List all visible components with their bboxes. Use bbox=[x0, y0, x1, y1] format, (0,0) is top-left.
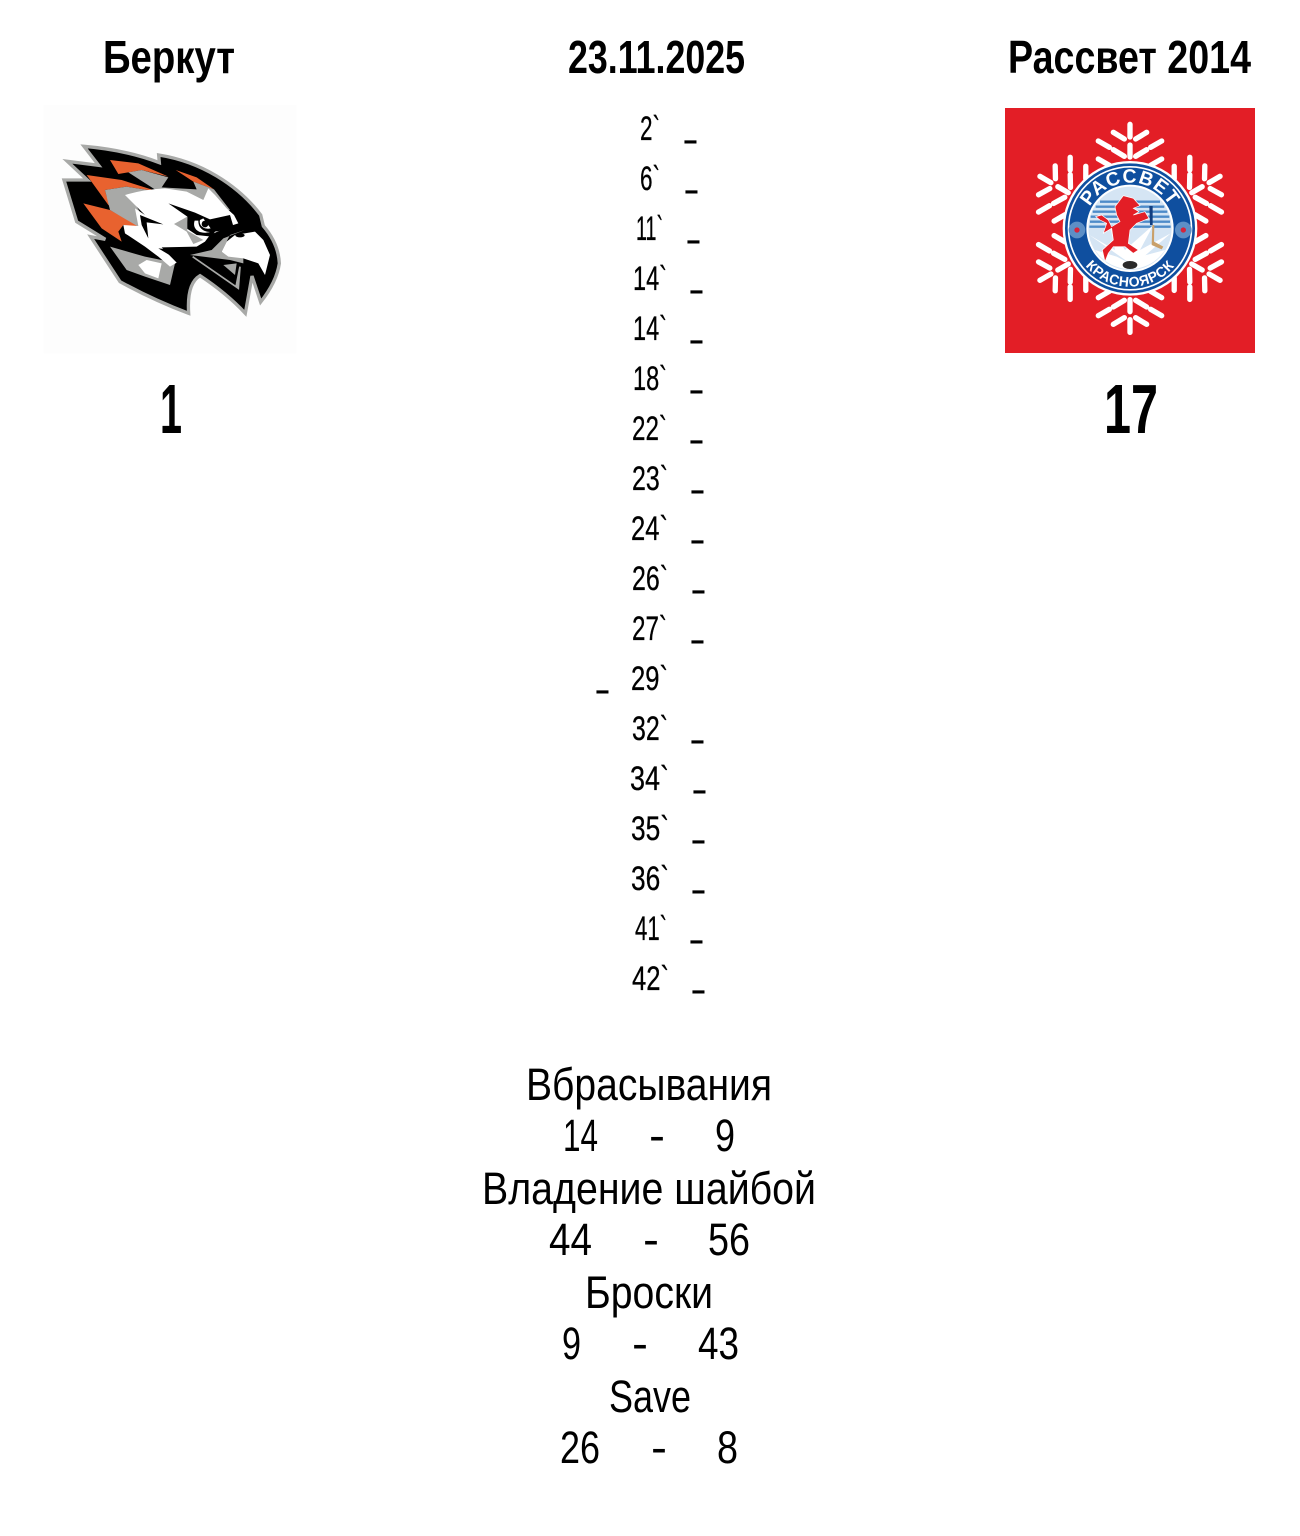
goal timeline: 14` bbox=[633, 260, 667, 298]
stat: saves: Save bbox=[609, 1371, 691, 1422]
crest disc: РАССВЕТ bbox=[1080, 169, 1181, 206]
goal timeline: _ bbox=[692, 806, 705, 844]
goal timeline: _ bbox=[690, 906, 703, 944]
goal timeline: _ bbox=[691, 706, 704, 744]
crest disc bbox=[1062, 161, 1198, 296]
stat: puck possession: 56 bbox=[708, 1214, 750, 1265]
stat: puck possession: 44 bbox=[549, 1214, 592, 1265]
stat: shots: Броски bbox=[585, 1267, 713, 1318]
goal timeline: _ bbox=[692, 956, 705, 994]
goal timeline: 22` bbox=[632, 410, 667, 448]
away team name: Рассвет 2014 bbox=[1008, 31, 1251, 83]
goal timeline: 29` bbox=[631, 660, 668, 698]
goal timeline: 26` bbox=[632, 560, 668, 598]
stat: saves: - bbox=[651, 1422, 667, 1473]
goal timeline: _ bbox=[692, 856, 705, 894]
stat: faceoffs bbox=[526, 1059, 772, 1161]
goal timeline: _ bbox=[690, 256, 703, 294]
stat: puck possession: - bbox=[643, 1214, 659, 1265]
match date: 23.11.2025 bbox=[568, 31, 745, 83]
stat: saves bbox=[560, 1371, 738, 1473]
stat: faceoffs: - bbox=[649, 1110, 665, 1161]
goal timeline: _ bbox=[693, 756, 706, 794]
goal timeline: _ bbox=[596, 656, 609, 694]
lion and stick bbox=[1096, 196, 1163, 262]
stat: faceoffs: 9 bbox=[715, 1110, 735, 1161]
stat: shots: 43 bbox=[698, 1318, 739, 1369]
goal timeline: _ bbox=[690, 306, 703, 344]
goal timeline: 41` bbox=[635, 910, 667, 948]
goal timeline: 27` bbox=[632, 610, 667, 648]
goal timeline: _ bbox=[687, 206, 700, 244]
stat: saves: 26 bbox=[560, 1422, 600, 1473]
goal timeline: _ bbox=[685, 156, 698, 194]
goal timeline bbox=[596, 106, 706, 998]
snowflake bbox=[1024, 124, 1236, 332]
goal timeline: 14` bbox=[633, 310, 667, 348]
goal timeline: _ bbox=[692, 556, 705, 594]
stat: shots: - bbox=[632, 1318, 648, 1369]
goal timeline: 36` bbox=[631, 860, 669, 898]
goal timeline: 2` bbox=[640, 110, 660, 148]
goal timeline: 23` bbox=[632, 460, 668, 498]
goal timeline: 35` bbox=[631, 810, 669, 848]
goal timeline: _ bbox=[684, 106, 697, 144]
goal timeline: _ bbox=[691, 456, 704, 494]
crest disc: КРАСНОЯРСК bbox=[1086, 260, 1174, 287]
goal timeline: 32` bbox=[632, 710, 668, 748]
goal timeline: _ bbox=[691, 606, 704, 644]
goal timeline: 6` bbox=[640, 160, 660, 198]
goal timeline: 42` bbox=[632, 960, 669, 998]
stat: faceoffs: Вбрасывания bbox=[526, 1059, 772, 1110]
goal timeline: _ bbox=[690, 356, 703, 394]
goal timeline: 11` bbox=[636, 210, 663, 248]
goal timeline: 24` bbox=[631, 510, 668, 548]
goal timeline: 34` bbox=[630, 760, 669, 798]
home score: 1 bbox=[160, 370, 182, 448]
goal timeline: _ bbox=[690, 406, 703, 444]
stat: shots: 9 bbox=[562, 1318, 581, 1369]
icon: Rassvet snowflake crest logo bbox=[1005, 108, 1255, 353]
stat: faceoffs: 14 bbox=[563, 1110, 598, 1161]
icon: Berkut eagle logo bbox=[43, 105, 297, 353]
stat: puck possession bbox=[482, 1163, 816, 1265]
stat: saves: 8 bbox=[717, 1422, 738, 1473]
goal timeline: _ bbox=[691, 506, 704, 544]
goal timeline: 18` bbox=[633, 360, 667, 398]
home team name: Беркут bbox=[103, 31, 235, 83]
stat: shots bbox=[562, 1267, 739, 1369]
stat: puck possession: Владение шайбой bbox=[482, 1163, 816, 1214]
puck bbox=[1123, 261, 1137, 269]
away score: 17 bbox=[1104, 370, 1158, 448]
